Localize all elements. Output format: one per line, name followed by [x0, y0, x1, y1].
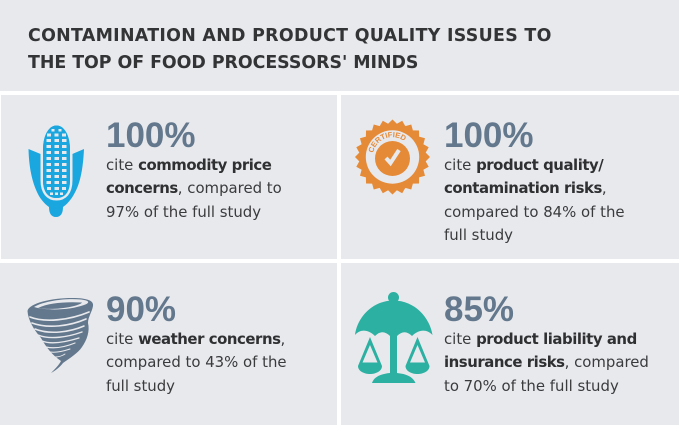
- text: weather: 90%: [106, 290, 176, 329]
- text: product liability: [444, 290, 649, 395]
- text: product quality: cite product quality/: [444, 156, 603, 174]
- text: product quality: 100%: [444, 116, 534, 155]
- text: product quality: [444, 116, 625, 244]
- text: product liability: cite product liability and: [444, 330, 637, 348]
- text: commodity price: concerns, compared to: [106, 179, 282, 197]
- text: commodity price: 97% of the full study: [106, 203, 261, 221]
- text: weather: full study: [106, 377, 175, 395]
- icon: certified badge: CERTIFIED: [368, 132, 406, 152]
- title: [28, 26, 552, 72]
- text: product liability: 85%: [444, 290, 514, 329]
- text: product quality: compared to 84% of the: [444, 203, 625, 221]
- text: commodity price: 100%: [106, 116, 196, 155]
- text: weather: compared to 43% of the: [106, 353, 287, 371]
- text: weather: cite weather concerns,: [106, 330, 285, 348]
- text: product liability: to 70% of the full study: [444, 377, 619, 395]
- text: commodity price: cite commodity price: [106, 156, 271, 174]
- text: product quality: full study: [444, 226, 513, 244]
- text: product liability: insurance risks, compared: [444, 353, 649, 371]
- text: commodity price: [106, 116, 282, 221]
- text: product quality: contamination risks,: [444, 179, 607, 197]
- panel: weather: [0, 263, 337, 425]
- panel: header: [0, 0, 679, 91]
- panel: product liability: [341, 263, 679, 425]
- text: weather: [106, 290, 287, 395]
- panel: product quality: [341, 95, 679, 259]
- title: CONTAMINATION AND PRODUCT QUALITY ISSUES TO: [28, 26, 552, 46]
- title: THE TOP OF FOOD PROCESSORS' MINDS: [28, 52, 418, 72]
- panel: commodity price: [1, 95, 337, 259]
